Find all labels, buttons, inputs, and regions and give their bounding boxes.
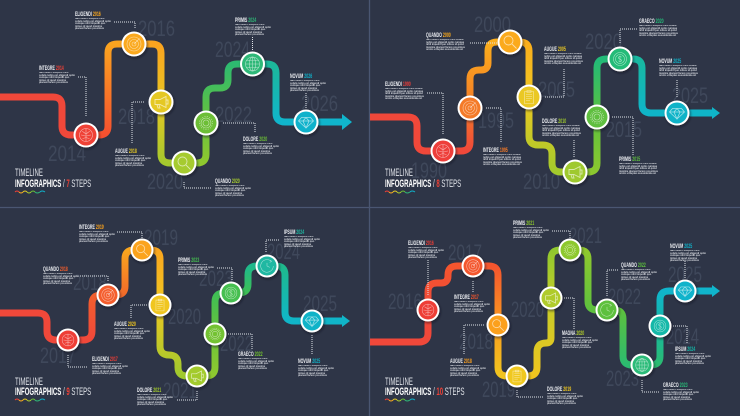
year labels: 7 steps [48, 16, 338, 194]
callout: Eligendi 2016 [75, 11, 111, 30]
node: 2022 gear [194, 110, 218, 136]
node: 2021 megaphone [186, 364, 208, 388]
node: 2024 coin [648, 314, 672, 338]
year labels: 9 steps: 2024 [267, 239, 300, 264]
heading: 7 steps: TIMELINE [15, 166, 43, 178]
callout: Integre 2019 [79, 224, 115, 243]
year labels: 9 steps: 2022 [220, 331, 253, 356]
callout: Graeco 2022: GRAECO 2022 [238, 351, 263, 358]
callout: Primis 2024: PRIMIS 2024 [235, 17, 256, 24]
callout: Dolore 2010 [542, 118, 582, 137]
callout: Eligendi 2017: ELIGENDI 2017 [92, 356, 118, 363]
heading: 9 steps [15, 375, 91, 401]
year labels: 10 steps: 2017 [448, 240, 482, 265]
node: 2020 magnifier [172, 150, 196, 176]
year labels: 10 steps: 2020 [511, 297, 544, 322]
callout: Primis 2024 [235, 17, 271, 36]
node: 2026 diamond [294, 110, 318, 134]
callout: Quando 2022 [621, 262, 657, 281]
node: 2021 gear [558, 238, 582, 262]
callout: Dolore 2019: DOLORE 2019 [547, 386, 571, 393]
year labels: 8 steps: 1995 [478, 108, 514, 133]
callout: Primis 2021: PRIMIS 2021 [513, 220, 534, 227]
callout: Eligendi 2016: ELIGENDI 2016 [408, 240, 434, 247]
callout: Ipsum 2024: IPSUM 2024 [284, 229, 304, 236]
callout: Augue 2020: AUGUE 2020 [114, 321, 136, 328]
callout: Quando 2020: QUANDO 2020 [215, 178, 240, 185]
callout: Eligendi 1990 [385, 81, 425, 100]
callout: Augue 2018: AUGUE 2018 [115, 148, 137, 155]
callout: Eligendi 2017 [92, 356, 128, 375]
year labels: 9 steps: 2020 [168, 304, 201, 329]
heading: 10 steps: TIMELINE [385, 375, 413, 387]
winding path with arrow: 8 steps [370, 42, 720, 172]
callout: Quando 2000: QUANDO 2000 [426, 32, 451, 39]
year labels: 9 steps: 2017 [40, 343, 76, 368]
heading: 8 steps: TIMELINE [385, 166, 413, 178]
year labels: 7 steps: 2024 [215, 37, 250, 62]
callout: Novum 2025: NOVUM 2025 [670, 243, 692, 250]
node: 2014 brain [74, 122, 98, 148]
year labels: 7 steps: 2018 [118, 104, 155, 129]
callout: Integre 1995 [483, 147, 523, 166]
dotted leader lines: 9 steps [68, 232, 312, 400]
year labels: 10 steps: 2024 [666, 324, 699, 349]
callout: Augue 2005: AUGUE 2005 [544, 46, 566, 53]
callout: Augue 2018 [115, 148, 151, 167]
year labels: 9 steps [40, 225, 337, 403]
callout: Quando 2000 [426, 32, 466, 51]
dotted leader lines: 7 steps [78, 22, 306, 188]
node: 1995 target [458, 96, 482, 120]
year labels: 8 steps: 2015 [606, 117, 642, 142]
panel: 10 steps timeline [370, 220, 720, 405]
year labels: 8 steps [411, 12, 708, 194]
year labels: 8 steps: 2005 [538, 77, 575, 102]
year labels: 9 steps: 2023 [199, 266, 233, 291]
heading: 8 steps [385, 166, 461, 193]
callout: Primis 2023: PRIMIS 2023 [178, 257, 199, 264]
node: 2018 megaphone [148, 90, 174, 114]
callout: Dolore 2021: DOLORE 2021 [137, 387, 161, 394]
callout: Novum 2026 [290, 73, 326, 92]
year labels: 10 steps: 2018 [459, 329, 493, 354]
dotted leader lines: 8 steps [427, 29, 677, 157]
year labels: 9 steps: 2018 [73, 270, 107, 295]
callout: Quando 2018: QUANDO 2018 [43, 266, 68, 273]
node: 2025 diamond [674, 280, 696, 302]
callout: Eligendi 1990: ELIGENDI 1990 [385, 81, 411, 88]
year labels: 10 steps: 2023 [606, 366, 639, 391]
year labels: 9 steps: 2025 [303, 291, 337, 316]
callout: Augue 2020 [114, 321, 150, 340]
year labels: 10 steps: 2025 [668, 262, 702, 287]
callout: Integre 1995: INTEGRE 1995 [483, 147, 508, 154]
year labels: 7 steps: 2022 [215, 102, 252, 127]
year labels: 10 steps: 2019 [482, 377, 515, 402]
callout: Primis 2021 [513, 220, 549, 239]
callout: Graeco 2020: GRAECO 2020 [639, 18, 664, 25]
callout: Primis 2023 [178, 257, 214, 276]
callout: Integre 2014 [39, 65, 75, 84]
year labels: 9 steps: 2019 [144, 225, 178, 250]
node: 2020 clipboard [148, 294, 172, 316]
node: 2025 diamond [664, 100, 690, 126]
node: 2010 megaphone [562, 160, 588, 184]
winding path with arrow: 10 steps [370, 250, 720, 376]
callout: Quando 2022: QUANDO 2022 [621, 262, 646, 269]
callout: Integre 2017: INTEGRE 2017 [454, 294, 479, 301]
callout: Integre 2014: INTEGRE 2014 [39, 65, 64, 72]
panel: 7 steps timeline [0, 11, 352, 197]
year labels: 8 steps: 2010 [523, 169, 560, 194]
callout: Graeco 2020 [639, 18, 679, 37]
year labels: 8 steps: 2000 [474, 12, 511, 37]
callout: Eligendi 2016 [408, 240, 444, 259]
node: 2017 target [462, 254, 484, 278]
callout: Dolore 2010: DOLORE 2010 [542, 118, 566, 125]
year labels: 10 steps: 2022 [608, 284, 641, 309]
callout: Eligendi 2016: ELIGENDI 2016 [75, 11, 101, 18]
callout: Graeco 2022 [238, 351, 274, 370]
callout: Graeco 2023 [663, 382, 699, 401]
callout: Novum 2026: NOVUM 2026 [290, 73, 312, 80]
year labels: 7 steps: 2014 [48, 141, 86, 166]
callout: Augue 2005 [544, 46, 584, 65]
callout: Novum 2025 [659, 58, 699, 77]
callout: Integre 2019: INTEGRE 2019 [79, 224, 104, 231]
node: 2020 coin [608, 46, 632, 72]
node: 2025 diamond [300, 310, 324, 332]
callout: Ipsum 2024 [284, 229, 320, 248]
node: 2019 magnifier [130, 238, 154, 262]
year labels: 10 steps: 2016 [388, 289, 422, 314]
node: 2023 coin [220, 282, 242, 304]
node: 1990 brain [430, 138, 456, 164]
node: 2023 globe [630, 354, 654, 376]
year labels: 7 steps: 2020 [147, 169, 183, 194]
heading: 7 steps: INFOGRAPHICS / 7 STEPS [15, 177, 91, 189]
callout: Novum 2025 [670, 243, 706, 262]
year labels: 9 steps: 2021 [163, 378, 197, 403]
year labels: 7 steps: 2016 [138, 16, 175, 41]
node: 2022 clock [596, 298, 618, 322]
callout: Quando 2020 [215, 178, 251, 197]
callout: Novum 2025: NOVUM 2025 [659, 58, 681, 65]
node: 2018 magnifier [486, 314, 510, 336]
year labels: 8 steps: 2020 [585, 29, 622, 54]
callout: Dolore 2019 [547, 386, 583, 405]
winding path with arrow: 9 steps [0, 250, 350, 376]
node: 2000 magnifier [498, 30, 522, 54]
node: 2019 clipboard [506, 364, 528, 388]
dotted leader lines: 10 steps [428, 231, 687, 397]
year labels: 10 steps [388, 223, 702, 402]
callout: Novum 2025: NOVUM 2025 [298, 358, 320, 365]
node: 2016 target [122, 32, 146, 56]
node: 2018 target [96, 284, 120, 306]
heading: 10 steps [385, 375, 465, 401]
heading: 7 steps [15, 166, 91, 193]
node: 2022 gear [204, 322, 226, 346]
year labels: 10 steps: 2021 [569, 223, 602, 248]
panel: 8 steps timeline [370, 12, 720, 194]
callout: Magna 2020: MAGNA 2020 [562, 330, 584, 337]
winding path with arrow: 7 steps [0, 44, 352, 163]
callout: Dolore 2020 [243, 136, 279, 155]
callout: Augue 2018: AUGUE 2018 [450, 358, 472, 365]
callout: Ipsum 2024 [675, 346, 711, 365]
node: 2016 brain [416, 298, 440, 322]
year labels: 8 steps: 2025 [672, 83, 708, 108]
callout: Dolore 2020: DOLORE 2020 [243, 136, 267, 143]
panel: 9 steps timeline [0, 224, 350, 406]
node: 2024 globe [240, 52, 265, 76]
callout: Augue 2018 [450, 358, 486, 377]
callout: Integre 2017 [454, 294, 490, 313]
heading: 8 steps: INFOGRAPHICS / 8 STEPS [385, 177, 461, 189]
node: 2017 brain [56, 328, 80, 352]
year labels: 7 steps: 2026 [301, 91, 338, 116]
callout: Primis 2015 [619, 156, 659, 175]
heading: 9 steps: TIMELINE [15, 375, 43, 387]
callout: Dolore 2021 [137, 387, 173, 406]
node: 2024 clock [256, 254, 278, 278]
year labels: 8 steps: 1990 [411, 158, 447, 183]
callout: Quando 2018 [43, 266, 79, 285]
heading: 9 steps: INFOGRAPHICS / 9 STEPS [15, 385, 91, 397]
node: 2020 megaphone [540, 286, 562, 310]
callout: Graeco 2023: GRAECO 2023 [663, 382, 688, 389]
callout: Magna 2020 [562, 330, 598, 349]
node: 2015 gear [584, 104, 610, 130]
node: 2005 clipboard [516, 84, 542, 110]
callout: Novum 2025 [298, 358, 334, 377]
callout: Ipsum 2024: IPSUM 2024 [675, 346, 695, 353]
heading: 10 steps: INFOGRAPHICS / 10 STEPS [385, 385, 465, 397]
callout: Primis 2015: PRIMIS 2015 [619, 156, 640, 163]
